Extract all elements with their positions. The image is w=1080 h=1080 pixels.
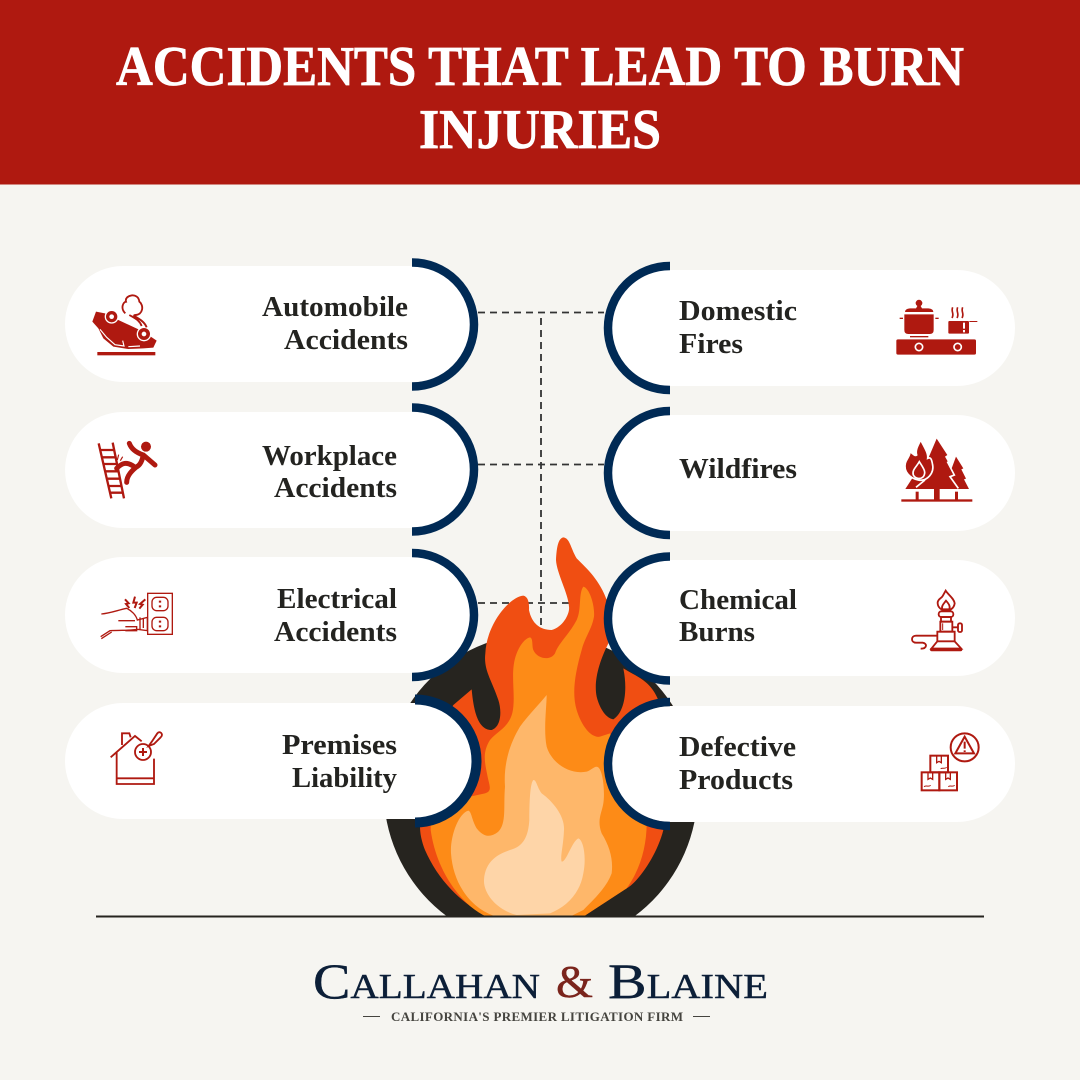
orange flame [431,587,647,917]
label [274,583,397,648]
logo [313,953,768,1024]
label: Chemical [679,584,797,616]
label: Burns [679,616,755,648]
icon: overturned car [92,295,157,355]
label: Workplace [262,440,397,472]
label [679,731,796,796]
outer red flame [420,537,665,917]
panel: premises liability [65,700,476,822]
label: Electrical [277,583,397,615]
icon: fall from ladder [99,442,155,498]
label: Wildfires [679,453,797,485]
panel: electrical accidents [65,553,474,677]
label [282,729,397,794]
label [679,295,797,360]
label: Accidents [274,616,397,648]
title: ACCIDENTS THAT LEAD TO BURN [116,36,964,98]
label: Automobile [262,291,408,323]
icon: hand at electrical outlet [101,593,172,639]
label: Premises [282,729,397,761]
label: Accidents [274,472,397,504]
logo wordmark: CALLAHAN [313,953,540,1009]
header banner [0,0,1080,184]
logo wordmark: BLAINE [608,953,768,1009]
dashed connector lines [478,312,604,632]
label: Fires [679,328,743,360]
panel: automobile accidents [65,262,474,386]
flame illustration [384,537,698,917]
icon: bunsen burner [912,591,962,650]
label: Defective [679,731,796,763]
label: Accidents [284,324,408,356]
icon: stove with pot and pan [896,300,977,355]
title: INJURIES [419,99,661,161]
title [116,36,964,161]
ground line [96,916,984,918]
panel: domestic fires [608,266,1015,390]
label: Domestic [679,295,797,327]
label [262,291,408,356]
label: Liability [292,762,397,794]
panel: workplace accidents [65,407,474,532]
logo tagline: CALIFORNIA'S PREMIER LITIGATION FIRM [391,1009,683,1024]
panel: defective products [608,702,1015,826]
panel: wildfires [608,411,1015,535]
dark circle behind flame [384,633,698,917]
label [262,440,397,504]
light orange flame [451,695,612,917]
label: Products [679,764,793,796]
icon: house with magnifier [111,732,162,784]
pale flame core [484,780,585,915]
icon: boxes with warning sign [922,733,979,790]
panel: chemical burns [608,556,1015,680]
logo wordmark [313,953,768,1009]
logo wordmark: & [556,956,593,1007]
label [679,584,797,648]
icon: burning trees [901,439,972,502]
